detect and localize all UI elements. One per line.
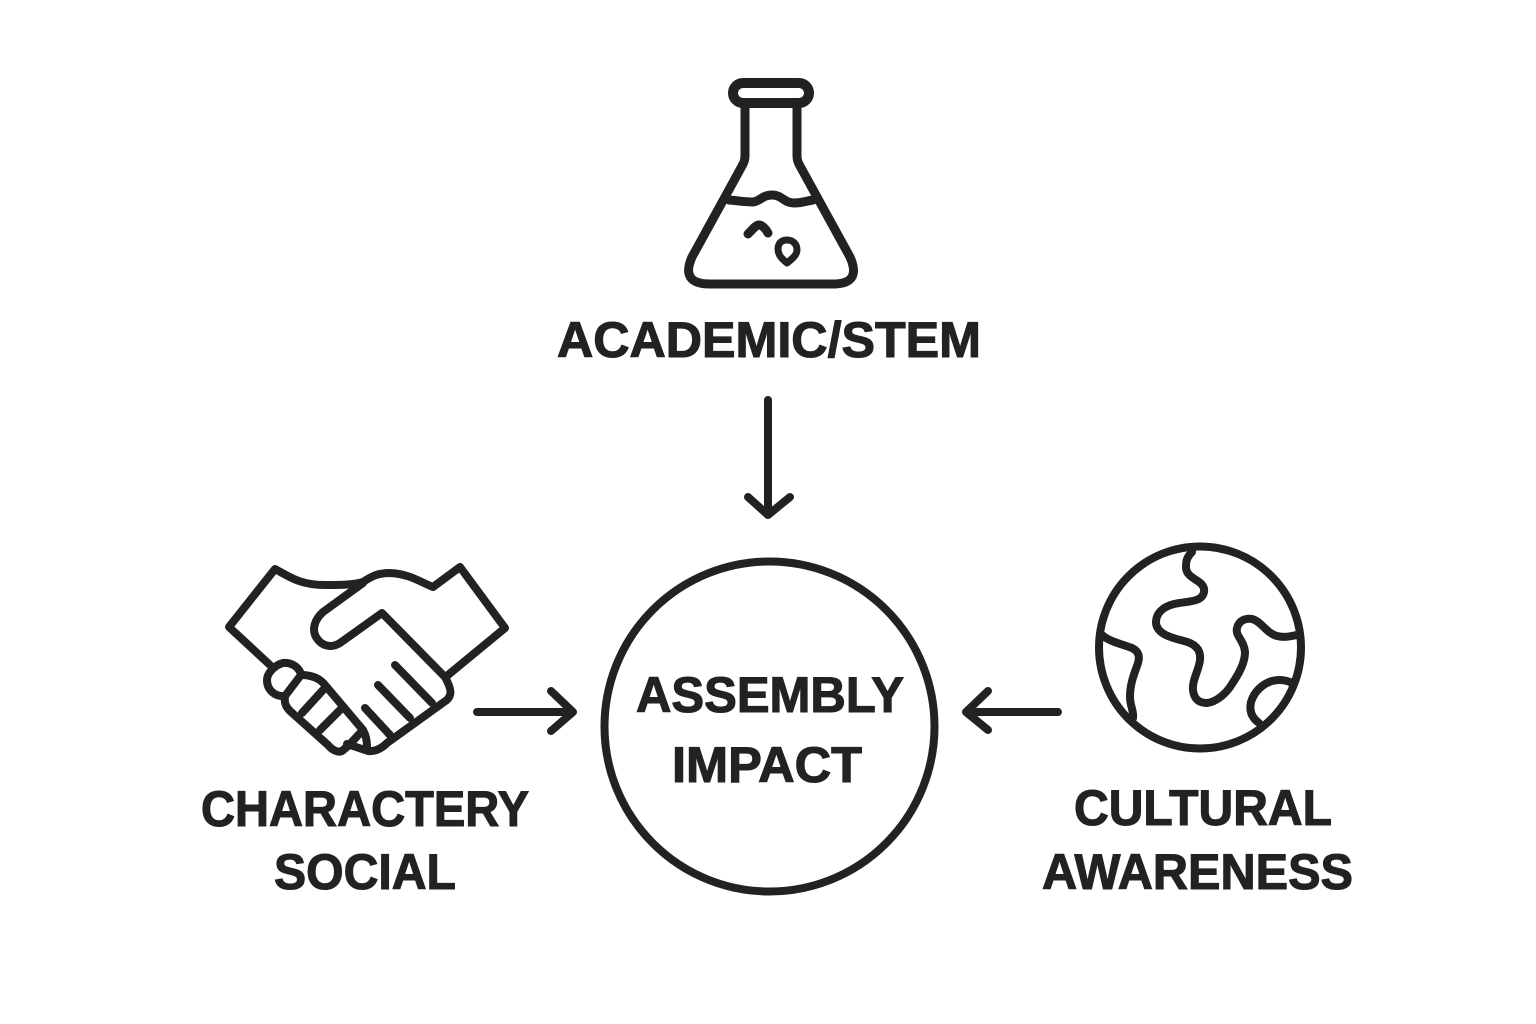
arrow: cultural awareness to impact <box>966 691 1058 730</box>
label: character social: CHARACTERY <box>201 781 529 837</box>
icon: handshake <box>229 567 505 752</box>
label: cultural awareness: AWARENESS <box>1042 844 1353 900</box>
arrow: down to impact <box>748 400 790 515</box>
center circle: assembly impact <box>604 562 934 892</box>
icon: globe <box>1099 546 1301 748</box>
label: character social <box>201 781 529 900</box>
icon: flask <box>689 83 854 284</box>
heading: academic/stem: ACADEMIC/STEM <box>557 312 981 368</box>
label: cultural awareness: CULTURAL <box>1074 780 1332 836</box>
label: assembly: ASSEMBLY <box>636 667 904 723</box>
label: impact: IMPACT <box>672 737 862 793</box>
label: character social: SOCIAL <box>274 844 456 900</box>
label: cultural awareness <box>1042 780 1353 900</box>
arrow: character social to impact <box>477 691 573 731</box>
